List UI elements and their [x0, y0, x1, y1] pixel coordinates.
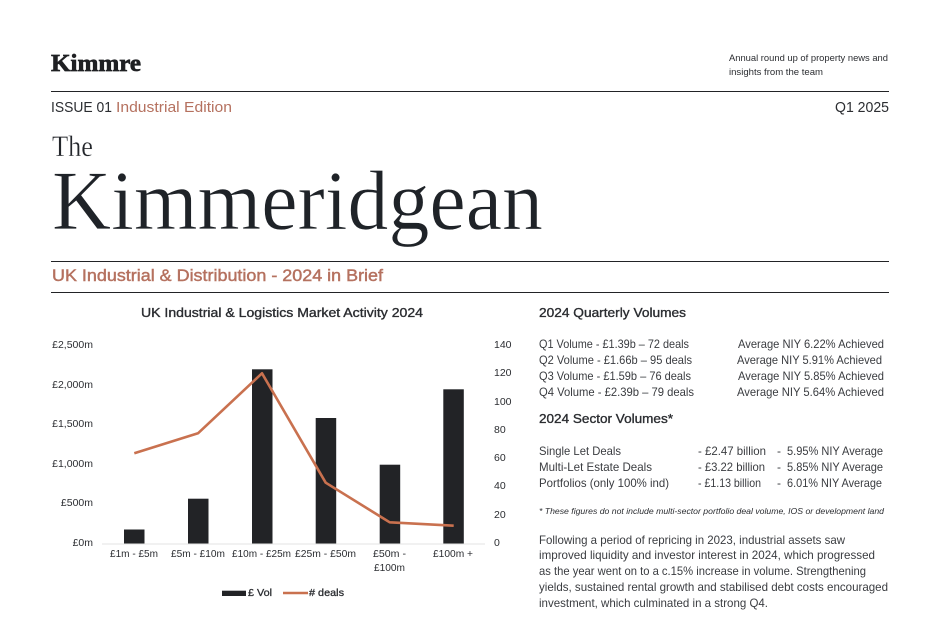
right axis labels: 20: [494, 509, 506, 521]
commentary paragraph: Following a period of repricing in 2023, industrial assets saw: [539, 533, 845, 547]
panel: market activity chart: [52, 305, 512, 599]
quarterly rows: [539, 337, 884, 399]
sector rows: [539, 444, 883, 490]
sector rows: Single Let Deals: [539, 444, 621, 458]
category labels: £50m -: [373, 548, 406, 560]
issue label: Industrial Edition: [116, 99, 232, 116]
footnote: * These figures do not include multi-sector portfolio deal volume, IOS or development land: [539, 506, 884, 516]
left axis labels: [52, 339, 93, 549]
sector rows: -: [777, 476, 781, 490]
right axis labels: 100: [494, 396, 512, 408]
category labels: [110, 548, 473, 574]
commentary paragraph: as the year went on to a c.15% increase in volume. Strengthening: [539, 564, 866, 578]
quarterly rows: Q4 Volume - £2.39b – 79 deals: [539, 385, 694, 399]
panel: quarterly volumes: [539, 305, 884, 399]
tagline: Annual round up of property news and: [729, 53, 888, 64]
category labels: £1m - £5m: [110, 548, 158, 560]
tagline: insights from the team: [729, 67, 823, 78]
commentary paragraph: improved liquidity and investor interest in 2024, which progressed: [539, 548, 875, 562]
sector rows: - £3.22 billion: [698, 460, 765, 474]
quarterly rows: Average NIY 5.64% Achieved: [737, 385, 884, 399]
heading: 2024 Sector Volumes*: [539, 411, 673, 426]
left axis labels: £0m: [73, 537, 93, 549]
legend: £ Vol: [248, 587, 272, 599]
quarterly rows: Q2 Volume - £1.66b – 95 deals: [539, 353, 692, 367]
left axis labels: £1,000m: [52, 458, 93, 470]
heading: 2024 Quarterly Volumes: [539, 305, 687, 320]
issue date: Q1 2025: [835, 99, 889, 116]
sector rows: - £1.13 billion: [698, 476, 761, 490]
left axis labels: £500m: [61, 497, 93, 509]
panel: sector volumes: [539, 411, 884, 516]
quarterly rows: Average NIY 5.85% Achieved: [738, 369, 884, 383]
line: number of deals: [134, 373, 454, 526]
bars: volume: [124, 369, 464, 544]
quarterly rows: Q1 Volume - £1.39b – 72 deals: [539, 337, 689, 351]
sector rows: Multi-Let Estate Deals: [539, 460, 652, 474]
legend: [222, 587, 344, 599]
logo: Kimmre: Kimmre: [51, 51, 141, 77]
category labels: £5m - £10m: [171, 548, 225, 560]
left axis labels: £2,000m: [52, 379, 93, 391]
title: Kimmeridgean: [52, 154, 543, 248]
section heading: UK Industrial & Distribution - 2024 in Brief: [52, 266, 383, 285]
right axis labels: 40: [494, 480, 506, 492]
sector rows: 5.95% NIY Average: [787, 444, 883, 458]
sector rows: -: [777, 444, 781, 458]
quarterly rows: Average NIY 6.22% Achieved: [738, 337, 884, 351]
right axis labels: 120: [494, 367, 512, 379]
chart title: UK Industrial & Logistics Market Activity 2024: [141, 305, 423, 320]
category labels: £25m - £50m: [295, 548, 356, 560]
quarterly rows: Q3 Volume - £1.59b – 76 deals: [539, 369, 691, 383]
right axis labels: 80: [494, 424, 506, 436]
sector rows: - £2.47 billion: [698, 444, 766, 458]
category labels: £100m +: [433, 548, 473, 560]
commentary paragraph: [539, 533, 888, 610]
left axis labels: £2,500m: [52, 339, 93, 351]
legend: # deals: [309, 587, 344, 599]
commentary paragraph: yields, sustained rental growth and stabilised debt costs encouraged: [539, 580, 888, 594]
right axis labels: 140: [494, 339, 512, 351]
issue label: ISSUE 01: [51, 99, 112, 116]
title: The: [52, 130, 93, 163]
right axis labels: [494, 339, 512, 549]
category labels: £100m: [374, 562, 405, 574]
tagline: [729, 53, 888, 78]
right axis labels: 0: [494, 537, 500, 549]
category labels: £10m - £25m: [232, 548, 291, 560]
right axis labels: 60: [494, 452, 506, 464]
issue label: [51, 99, 232, 116]
sector rows: -: [777, 460, 781, 474]
commentary paragraph: investment, which culminated in a strong Q4.: [539, 596, 768, 610]
sector rows: 6.01% NIY Average: [787, 476, 882, 490]
sector rows: 5.85% NIY Average: [787, 460, 883, 474]
sector rows: Portfolios (only 100% ind): [539, 476, 669, 490]
quarterly rows: Average NIY 5.91% Achieved: [737, 353, 882, 367]
left axis labels: £1,500m: [52, 418, 93, 430]
